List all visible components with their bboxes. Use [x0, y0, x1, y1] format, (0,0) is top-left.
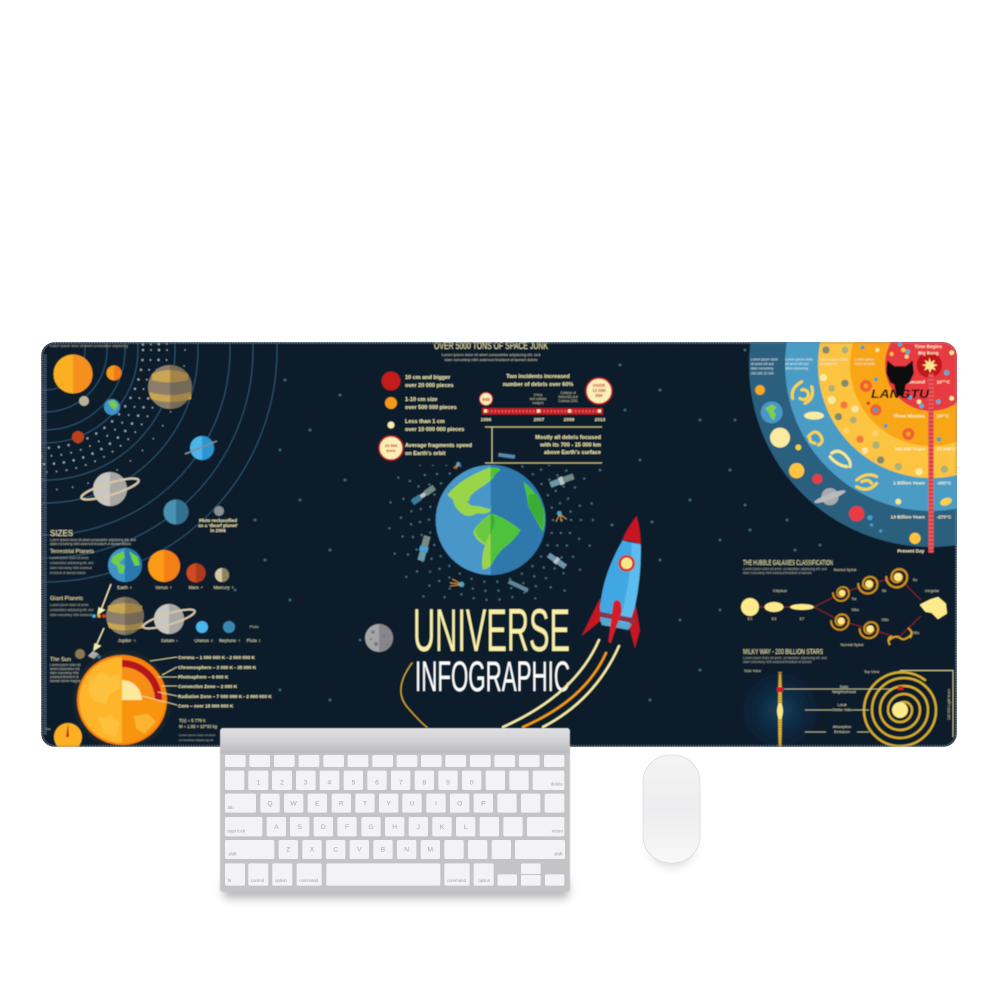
- giant text: diam nonummy nibh euismod: [50, 613, 92, 617]
- ring captions: Lorem ipsum dolor: [820, 358, 848, 362]
- key legends: 5: [351, 779, 355, 786]
- mouse: [643, 755, 700, 866]
- junk intro text: diam nonummy nibh euismod tincidunt ut laoreet dolore: [444, 358, 538, 362]
- keyboard: [220, 728, 570, 898]
- giant text: Lorem ipsum dolor sit amet,: [50, 603, 89, 607]
- chart: debris timeline: [481, 391, 606, 423]
- milky way labels: Local: [837, 703, 847, 707]
- speed badge: 20 568: [385, 443, 398, 448]
- milky way labels: Absorption: [833, 725, 851, 729]
- speed badge: km/h: [386, 448, 396, 453]
- key legends: J: [417, 824, 420, 831]
- icon: mars: [72, 431, 84, 443]
- hubble labels: E0: [748, 617, 752, 621]
- heading: hubble: THE HUBBLE GALAXIES CLASSIFICATION: [743, 560, 833, 567]
- yellow ring nebulae: [820, 346, 948, 475]
- hubble fork lines: [758, 577, 921, 638]
- planet labels row 2: Neptune ♆: [219, 638, 241, 643]
- small debris label: over 10 000 000 pieces: [405, 427, 464, 433]
- key legends: N: [404, 847, 409, 854]
- chart: debris timeline: Cosmos 2251: [558, 399, 578, 403]
- sun layer labels: Photosphere – 6 000 K: [178, 674, 229, 680]
- sun formulas: T(s) = 5 778 K: [179, 718, 206, 723]
- keyboard body: [220, 728, 570, 892]
- temperature labels: -270°C: [937, 515, 952, 520]
- key legends: O: [457, 801, 462, 808]
- icon: mercury orbit planet: [106, 366, 122, 380]
- mouse shadow: [650, 820, 694, 866]
- chart: debris timeline: 2009: [564, 417, 575, 423]
- modifier legends: tab: [228, 805, 234, 810]
- scale label: 100 000 Light Years: [947, 689, 951, 720]
- temperature labels: 10¹²°C: [937, 379, 951, 384]
- mat stitching: [42, 343, 956, 746]
- panel: solar system: [0, 118, 277, 582]
- heading: milky way: MILKY WAY - 200 BILLION STARS: [743, 649, 823, 656]
- ring captions: diam nonummy: [785, 366, 808, 370]
- temperature labels: 10 000°C: [937, 447, 957, 452]
- key legends: 8: [422, 779, 426, 786]
- key legends: 3: [304, 779, 308, 786]
- panel: hubble classification: [741, 560, 946, 647]
- red core: [885, 319, 977, 411]
- ring captions: sit amet elit sed: [751, 362, 774, 366]
- modifier legends: option: [275, 878, 287, 883]
- modifier legends: command: [299, 878, 319, 883]
- desk mat: [41, 342, 957, 747]
- terrestrial text: Lorem ipsum dolor sit amet,: [50, 556, 89, 560]
- key legends: F: [345, 824, 349, 831]
- orange ring flowers: [860, 345, 941, 442]
- chart: debris timeline: Collision of: [560, 391, 576, 395]
- large debris label: over 20 000 pieces: [405, 383, 454, 389]
- panel: the sun: [45, 650, 272, 747]
- icon: jupiter large: [106, 597, 144, 635]
- planet labels row 2: Saturn ♄: [161, 638, 179, 643]
- terrestrial text: diam nonummy nibh euismod: [50, 566, 92, 570]
- milky way text: diam nonummy nibh euismod tincidunt ut laoreet: [743, 660, 812, 664]
- modifier legends: shift: [554, 851, 563, 856]
- arrow: giant to sun: [94, 628, 104, 650]
- badge over 13 000 000: 000: [595, 393, 603, 398]
- badge 948: 948: [482, 397, 490, 402]
- key legends: Z: [286, 847, 290, 854]
- sun formulas: M = 1.99 × 10^30 kg: [179, 724, 218, 729]
- key legends: M: [428, 847, 433, 854]
- milky way labels: Solar: [840, 685, 849, 689]
- ring captions: diam nonummy: [751, 366, 774, 370]
- milky way connectors: [784, 689, 892, 732]
- pie label: Sun: [45, 727, 51, 731]
- outer ring: [749, 183, 1000, 547]
- badge over 13 000 000: 13 000: [592, 388, 606, 393]
- badge 948: [480, 392, 492, 406]
- icon: wolf head: [887, 362, 913, 395]
- speed label: Average fragments speed: [405, 443, 472, 449]
- key legends: G: [368, 824, 374, 831]
- pluto large: Pluto: [249, 624, 259, 629]
- icon: medium debris: [385, 397, 397, 409]
- title: universe: UNIVERSE: [413, 597, 570, 664]
- key legends: I: [435, 801, 437, 808]
- keyboard shadow: [224, 880, 568, 898]
- sun text: laoreet dolore magna: [50, 679, 80, 683]
- sun layer leader lines: [142, 657, 177, 705]
- icon: rocket: [582, 516, 641, 648]
- modifier legends: delete: [551, 782, 563, 787]
- small debris label: Less than 1 cm: [405, 419, 445, 425]
- key row: bottom: [225, 863, 564, 886]
- sun text: Lorem ipsum dolor sit: [50, 663, 81, 667]
- icon: saturn large: [142, 604, 196, 634]
- milky way labels: Neighborhood: [832, 690, 856, 694]
- key row: asdf: [225, 817, 564, 836]
- key legends: 9: [446, 779, 450, 786]
- hubble labels: Sb: [882, 589, 886, 593]
- side view label: Side View: [744, 669, 761, 673]
- heading: the sun: The Sun: [50, 657, 71, 663]
- sun layer labels: Convective Zone – 2 000 K: [178, 684, 238, 689]
- small planets row: [92, 614, 106, 618]
- sun text: diam nonummy nibh: [50, 671, 79, 675]
- chart: debris timeline: weapon: [532, 401, 544, 405]
- chart: debris timeline: test collides: [530, 397, 547, 401]
- icon: neptune large: [223, 621, 235, 633]
- key legends: 1: [256, 779, 260, 786]
- sun small text: consectetur adipiscing elit: [179, 738, 214, 742]
- hubble labels: Barred Spiral: [834, 568, 856, 572]
- icon: grey planet: [79, 396, 89, 406]
- ring galaxies: [792, 382, 953, 507]
- hubble labels: Irregular: [925, 589, 940, 593]
- modifier legends: return: [552, 828, 564, 833]
- key row: qwerty: [225, 794, 564, 813]
- sizes text: Lorem ipsum dolor sit amet consectetur adipiscing elit, sed: [50, 538, 136, 542]
- hubble labels: E7: [800, 617, 804, 621]
- junk intro text: Lorem ipsum dolor sit amet consectetur adipiscing elit, sed: [442, 353, 540, 357]
- hubble labels: SBc: [913, 631, 920, 635]
- key legends: Q: [267, 801, 273, 808]
- chart: sun composition pie: [54, 723, 82, 751]
- large debris label: 10 cm and bigger: [405, 375, 451, 381]
- planet labels row 1: Venus ♀: [155, 585, 173, 590]
- modifier legends: shift: [228, 851, 237, 856]
- middle ring: [785, 219, 1000, 511]
- time labels: 1 Second: [904, 379, 925, 384]
- modifier legends: command: [447, 878, 467, 883]
- panel: time rings: [749, 183, 1000, 553]
- planet labels row 1: Mars ♂: [189, 585, 203, 590]
- icon: neptune: [164, 500, 188, 524]
- logo: langtu: [871, 362, 929, 401]
- icon: jupiter: [148, 365, 192, 409]
- hubble labels: SBa: [851, 608, 859, 612]
- rocket trails: [401, 640, 619, 727]
- modifier legends: control: [251, 878, 264, 883]
- sun layer labels: Radiative Zone – 7 000 000 K - 2 000 000 K: [178, 694, 272, 699]
- modifier legends: fn: [228, 878, 232, 883]
- icon: earth: [108, 548, 142, 582]
- icon: uranus large: [196, 621, 208, 633]
- icon: large debris: [382, 372, 400, 390]
- asteroid belt: [41, 342, 186, 491]
- temperature labels: -200°C: [937, 481, 952, 486]
- icon: small debris: [388, 422, 394, 428]
- ring planets: [755, 385, 921, 544]
- orbits: [0, 118, 277, 582]
- icon: pluto: [214, 506, 224, 516]
- key legends: V: [357, 847, 362, 854]
- key legends: C: [333, 847, 338, 854]
- time labels: 1 Billion Years: [893, 481, 925, 486]
- chart: debris timeline: Iridium33 and: [558, 395, 578, 399]
- time labels: Present Day: [897, 548, 925, 553]
- pluto note: in 2006: [210, 528, 226, 533]
- sun text: amet consectetur elit,: [50, 667, 80, 671]
- elliptical galaxies: [741, 598, 814, 616]
- heading: giant planets: Giant Planets: [50, 596, 83, 602]
- pluto note: Pluto reclassified: [199, 518, 237, 523]
- icon: moon: [365, 624, 393, 652]
- time labels: Three Minutes: [893, 413, 925, 418]
- key row: function: [225, 755, 564, 767]
- icon: venus: [148, 550, 180, 582]
- badge over 13 000 000: [586, 378, 612, 404]
- key legends: U: [410, 801, 415, 808]
- medium debris label: 1-10 cm size: [405, 397, 437, 403]
- planet labels row 1: Mercury ☿: [214, 585, 234, 590]
- key legends: E: [315, 801, 320, 808]
- time labels: 13 Billion Years: [891, 515, 925, 520]
- debris dots around earth: [389, 418, 593, 622]
- incidents heading: Two incidents increased: [506, 374, 570, 380]
- key legends: H: [392, 824, 397, 831]
- planet labels row 2: Jupiter ♃: [118, 638, 136, 643]
- terrestrial text: tincidunt ut laoreet dolore: [50, 571, 86, 575]
- modifier legends: caps lock: [227, 828, 246, 833]
- hubble text: Lorem ipsum dolor sit amet, consectetur adipiscing elit, sed: [743, 567, 827, 571]
- key legends: L: [464, 824, 468, 831]
- altitude note: above Earth's surface: [544, 450, 601, 456]
- key legends: S: [297, 824, 302, 831]
- heading: space junk: OVER 5000 TONS OF SPACE JUNK: [434, 341, 548, 352]
- key legends: 4: [327, 779, 331, 786]
- side view galaxy: [777, 672, 783, 748]
- sun small text: Lorem ipsum dolor sit amet: [179, 733, 215, 737]
- top view label: Top View: [864, 670, 880, 674]
- icon: sun: [54, 354, 92, 394]
- icon: mercury: [215, 568, 229, 582]
- chart: debris timeline: 1996: [481, 417, 492, 423]
- icon: saturn: [80, 472, 140, 506]
- milky way labels: Stellar Halo: [832, 708, 852, 712]
- altitude note: with its 700 - 15 000 km: [539, 442, 601, 448]
- panel: milky way: [740, 649, 953, 750]
- keys: [225, 755, 565, 886]
- mouse body: [643, 755, 700, 863]
- chart: debris timeline: China: [534, 393, 542, 397]
- key row: zxcv: [225, 840, 565, 859]
- panel: sizes: [50, 529, 261, 659]
- icon: large sun cutaway: [77, 655, 167, 745]
- sun layer labels: Corona – 1 000 000 K - 2 000 000 K: [178, 655, 255, 660]
- icon: earth small: [104, 399, 120, 415]
- terrestrial text: consectetur adipiscing elit, sed: [50, 561, 94, 565]
- time begins label: Big Bang: [918, 350, 939, 355]
- ring captions: dolor sit amet: [855, 362, 875, 366]
- top view frame: [900, 670, 953, 737]
- hubble labels: Sa: [852, 597, 857, 601]
- hubble text: diam nonummy nibh euismod tincidunt ut laoreet: [743, 571, 812, 575]
- ring captions: Lorem ipsum: [855, 358, 874, 362]
- icon: big bang star: [922, 357, 938, 373]
- yellow ring: [818, 252, 1000, 478]
- time labels: 300 000 Years: [895, 447, 925, 452]
- icon: satellites: [411, 453, 575, 592]
- logo text: LANGTU: [871, 387, 929, 401]
- sun text: euismod tincidunt ut: [50, 675, 78, 679]
- key legends: P: [481, 801, 486, 808]
- speed badge: [379, 436, 403, 460]
- heading: terrestrial planets: Terrestrial Planets: [50, 549, 94, 555]
- time begins label: Time Begins: [915, 344, 943, 349]
- time bar: [928, 373, 934, 553]
- key legends: A: [274, 824, 279, 831]
- key legends: Y: [386, 801, 391, 808]
- key legends: 0: [470, 779, 474, 786]
- panel: space junk: [379, 341, 612, 463]
- key legends: R: [339, 801, 344, 808]
- side view glow: [740, 670, 820, 750]
- key legends: W: [291, 801, 298, 808]
- hubble labels: Normal Spiral: [840, 643, 864, 647]
- ring captions: 100 000 20 000: [751, 371, 774, 375]
- small planets by sun: [75, 649, 101, 659]
- key legends: 2: [280, 779, 284, 786]
- heading: sizes: SIZES: [50, 529, 73, 538]
- hubble labels: E3: [772, 617, 776, 621]
- key row: numbers: [225, 771, 564, 790]
- giant text: consectetur adipiscing elit, sed: [50, 608, 94, 612]
- sun layer labels: Chromosphere – 3 000 K - 35 000 K: [178, 665, 257, 670]
- orbit altitude bracket: [485, 427, 602, 463]
- key legends: T: [363, 801, 367, 808]
- ring captions: Lorem ipsum dolor: [751, 358, 779, 362]
- spiral galaxies: [831, 569, 912, 645]
- key legends: X: [310, 847, 315, 854]
- hubble labels: Elliptical: [773, 589, 787, 593]
- icon: irregular galaxy: [921, 598, 946, 618]
- icon: mars large: [186, 564, 206, 582]
- medium debris label: over 500 000 pieces: [405, 405, 457, 411]
- ring captions: sit amet elit: [820, 362, 837, 366]
- milky way labels: Emission: [834, 730, 850, 734]
- planet labels row 2: Pluto ♇: [247, 638, 261, 643]
- hubble labels: Sc: [913, 578, 917, 582]
- ring captions: Lorem ipsum dolor: [785, 358, 814, 362]
- ring captions: sit amet elit sed: [785, 362, 809, 366]
- sizes text: diam nonummy nibh euismod tincidunt ut laoreet dolore: [50, 542, 131, 546]
- incidents heading: number of debris over 60%: [503, 382, 573, 388]
- milky way text: Lorem ipsum dolor sit amet, consectetur adipiscing elit, sed: [743, 656, 827, 660]
- key legends: K: [440, 824, 445, 831]
- sun layer labels: Core – over 15 000 000 K: [178, 704, 234, 708]
- chart: debris timeline: 2007: [534, 417, 545, 423]
- speed label: on Earth's orbit: [405, 451, 446, 457]
- key legends: 6: [375, 779, 379, 786]
- planet labels row 1: Earth ♁: [117, 585, 133, 590]
- altitude note: Mostly all debris focused: [535, 435, 601, 441]
- modifier legends: option: [478, 878, 491, 883]
- pluto note: as a 'dwarf planet': [198, 523, 238, 528]
- red core particles: [890, 342, 954, 408]
- sun glow: [66, 644, 178, 756]
- key legends: D: [321, 824, 326, 831]
- chart: debris timeline: 2013: [595, 417, 606, 423]
- top caption: Lorem ipsum dolor sit amet consectetur adipiscing: [50, 344, 128, 348]
- background stars: [235, 350, 820, 700]
- key legends: B: [381, 847, 386, 854]
- hubble labels: SBb: [881, 618, 889, 622]
- icon: earth large: [436, 465, 546, 575]
- orange ring: [850, 284, 1000, 446]
- icon: uranus: [185, 436, 217, 460]
- temperature labels: 10⁹°C: [937, 413, 950, 418]
- badge over 13 000 000: OVER: [593, 383, 606, 388]
- arrow: terrestrial to giant: [98, 584, 111, 614]
- key legends: 7: [399, 779, 403, 786]
- top view spiral galaxy: [864, 672, 936, 746]
- title: infographic: INFOGRAPHIC: [415, 653, 570, 701]
- planet labels row 2: Uranus ♅: [194, 638, 214, 643]
